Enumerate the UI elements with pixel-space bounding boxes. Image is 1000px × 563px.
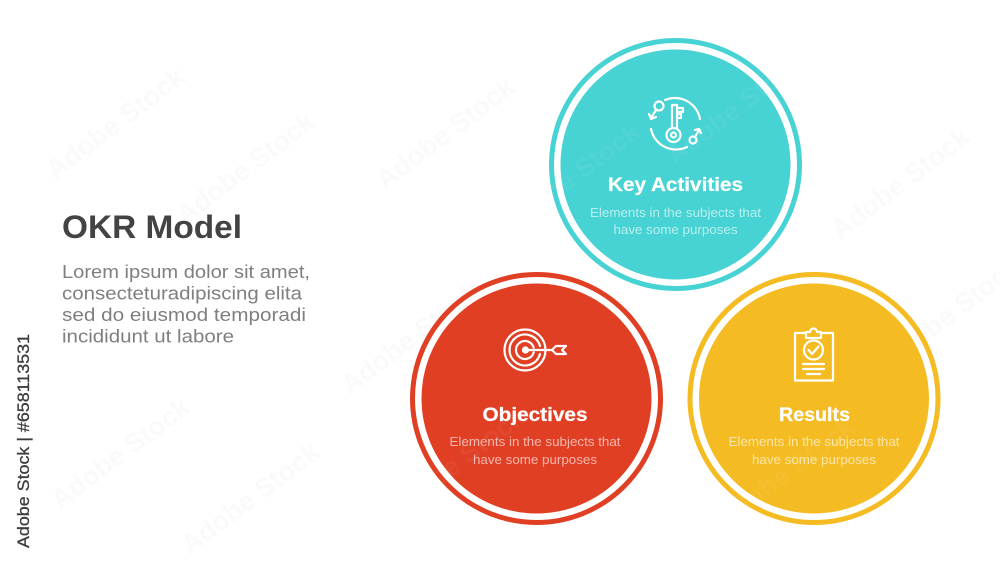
text: objectives description	[450, 434, 621, 467]
icon: target with arrow	[504, 330, 566, 370]
text block: description: consecteturadipiscing elita	[62, 284, 303, 304]
text: key activities description: Elements in the subjects that	[590, 205, 761, 220]
text: objectives description: have some purposes	[473, 452, 598, 467]
icon: key with cycle arrows	[649, 98, 701, 149]
watermark pattern: Adobe Stock	[176, 436, 326, 560]
text: key activities description	[590, 205, 761, 237]
heading: key activities: Key Activities	[608, 175, 743, 196]
stock id label: Adobe Stock | #658113531	[14, 334, 33, 548]
text: results description: have some purposes	[752, 452, 877, 467]
watermark pattern: Adobe Stock	[371, 71, 521, 195]
text block: description: Lorem ipsum dolor sit amet,	[62, 262, 310, 282]
text: objectives description: Elements in the subjects that	[450, 434, 621, 449]
watermark over circles: Adobe Stock	[381, 401, 531, 525]
panel: objectives circle	[412, 274, 660, 522]
text: key activities description: have some purposes	[614, 222, 738, 237]
panel: results circle	[690, 274, 938, 522]
heading: results: Results	[779, 405, 850, 426]
text block: description: incididunt ut labore	[62, 326, 234, 346]
text block: description: sed do eiusmod temporadi	[62, 305, 306, 325]
watermark pattern: Adobe Stock	[171, 106, 321, 230]
panel: key activities circle	[552, 40, 800, 288]
watermark pattern: Adobe Stock	[46, 391, 196, 515]
watermark pattern: Adobe Stock	[41, 61, 191, 185]
watermark over circles: Adobe Stock	[711, 411, 861, 535]
title: OKR Model	[62, 209, 242, 245]
watermark pattern: Adobe Stock	[336, 276, 486, 400]
watermark over circles	[381, 46, 861, 535]
text: results description: Elements in the subjects that	[728, 434, 900, 449]
text block: description	[62, 262, 310, 346]
watermark over circles: Adobe Stock	[661, 46, 811, 170]
heading: objectives: Objectives	[482, 405, 588, 426]
text: results description	[728, 434, 900, 467]
icon: clipboard with check	[795, 328, 833, 380]
watermark over circles: Adobe Stock	[496, 116, 646, 240]
watermark pattern: Adobe Stock	[826, 121, 976, 245]
